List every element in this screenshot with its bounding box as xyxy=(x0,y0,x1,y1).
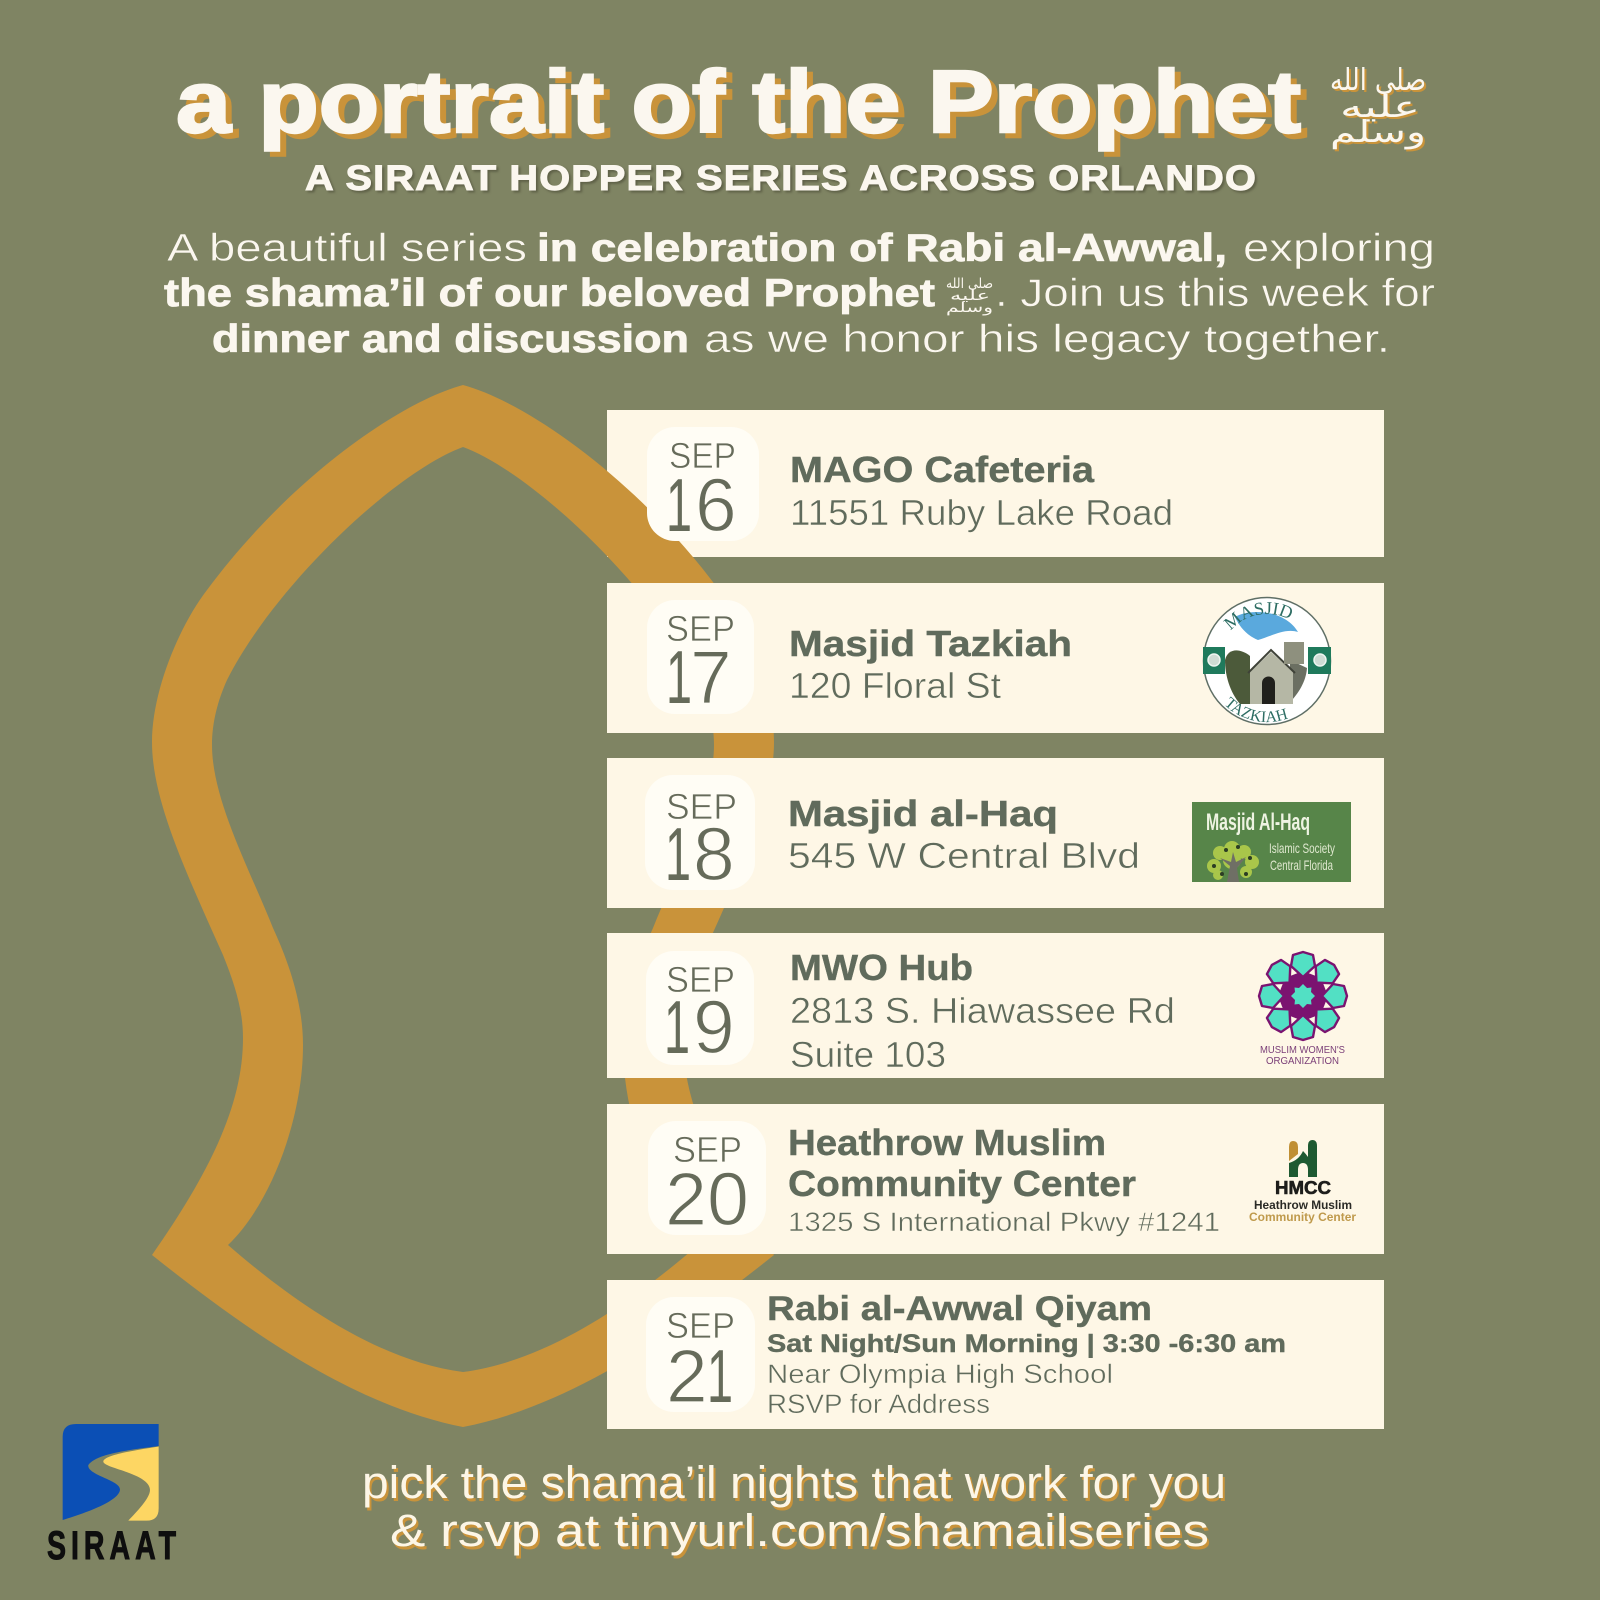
logo: Masjid Tazkiah: MASJID xyxy=(1223,602,1292,630)
card: Rabi al-Awwal Qiyam sep 21: Sat Night/Sun Morning | 3:30 -6:30 am xyxy=(767,1330,1286,1358)
card: MWO Hub sep 19: 9 xyxy=(693,985,735,1069)
card: Heathrow Muslim Community Center sep 20: 20 xyxy=(665,1157,749,1241)
logo: Siraat xyxy=(47,1424,181,1568)
intro paragraph: صلى الله xyxy=(946,276,993,292)
card: Masjid Tazkiah sep 17: SEP xyxy=(666,608,735,649)
icon: honorific calligraphy xyxy=(1330,63,1426,150)
logo: Masjid Al-Haq: Masjid Al-Haq xyxy=(1206,809,1310,836)
logo: Siraat: SIRAAT xyxy=(47,1524,181,1568)
gold arch outline shape xyxy=(152,385,774,1427)
icon: honorific calligraphy: عليه xyxy=(1340,90,1420,125)
card: MAGO Cafeteria sep 16: 1 xyxy=(666,463,692,547)
card: Masjid al-Haq sep 18: 8 xyxy=(693,812,735,896)
icon: honorific calligraphy: وسلم xyxy=(1330,115,1426,150)
card: Masjid al-Haq sep 18: 545 W Central Blvd xyxy=(788,835,1140,876)
card: Heathrow Muslim Community Center sep 20: SEP xyxy=(673,1129,742,1170)
card: Masjid al-Haq sep 18: Masjid al-Haq xyxy=(788,793,1058,834)
logo: Muslim Women's Organization: MUSLIM WOMEN'S xyxy=(1260,1045,1345,1056)
card: Rabi al-Awwal Qiyam sep 21: Rabi al-Awwal Qiyam xyxy=(767,1290,1152,1328)
card: MAGO Cafeteria sep 16: SEP xyxy=(669,435,736,476)
icon: honorific calligraphy: صلى الله xyxy=(1330,63,1426,98)
card: Masjid al-Haq sep 18 xyxy=(607,758,1384,908)
card: Heathrow Muslim Community Center sep 20: Community Center xyxy=(788,1163,1136,1204)
intro paragraph: . Join us this week for xyxy=(995,272,1435,315)
card: Heathrow Muslim Community Center sep 20: Heathrow Muslim xyxy=(788,1122,1106,1163)
card background: sep 16 xyxy=(607,410,1384,557)
intro paragraph: as we honor his legacy together. xyxy=(704,318,1390,361)
card: Masjid al-Haq sep 18: 1 xyxy=(665,812,691,896)
card: MWO Hub sep 19: 2813 S. Hiawassee Rd xyxy=(790,990,1175,1031)
card: Masjid Tazkiah sep 17 xyxy=(607,583,1384,733)
intro paragraph: the shama’il of our beloved Prophet xyxy=(164,272,935,315)
logo: Masjid Tazkiah xyxy=(1202,596,1332,726)
card: MAGO Cafeteria sep 16: MAGO Cafeteria xyxy=(790,449,1095,490)
card: Masjid Tazkiah sep 17: Masjid Tazkiah xyxy=(789,623,1072,664)
logo: HMCC: Community Center xyxy=(1249,1212,1357,1224)
card: Heathrow Muslim Community Center sep 20: 1325 S International Pkwy #1241 xyxy=(788,1207,1220,1237)
card: MAGO Cafeteria sep 16 xyxy=(647,427,1173,547)
card: MWO Hub sep 19 xyxy=(607,933,1384,1078)
subtitle: A SIRAAT HOPPER SERIES ACROSS ORLANDO xyxy=(305,159,1257,198)
logo: HMCC: Heathrow Muslim xyxy=(1254,1200,1352,1212)
card: Rabi al-Awwal Qiyam sep 21: SEP xyxy=(666,1305,735,1346)
card: MWO Hub sep 19: MWO Hub xyxy=(790,947,973,988)
card: Masjid Tazkiah sep 17: 1 xyxy=(666,635,692,719)
card: Heathrow Muslim Community Center sep 20 xyxy=(607,1104,1384,1254)
intro paragraph: in celebration of Rabi al-Awwal, xyxy=(537,227,1227,270)
call to action: pick the shama’il nights that work for you xyxy=(362,1457,1226,1508)
intro paragraph: عليه xyxy=(950,288,990,304)
logo: Muslim Women's Organization xyxy=(1259,952,1347,1067)
card: MWO Hub sep 19: Suite 103 xyxy=(790,1034,946,1075)
logo: HMCC: HMCC xyxy=(1275,1178,1331,1198)
logo: Masjid Tazkiah: TAZKIAH xyxy=(1226,696,1288,722)
logo: Masjid Al-Haq xyxy=(1192,802,1351,882)
call to action: & rsvp at tinyurl.com/shamailseries xyxy=(390,1505,1209,1556)
card: MWO Hub sep 19: 1 xyxy=(664,985,690,1069)
card: Rabi al-Awwal Qiyam sep 21: RSVP for Address xyxy=(767,1389,990,1419)
card: Masjid Tazkiah sep 17: 7 xyxy=(690,635,732,719)
title: a portrait of the Prophet xyxy=(176,52,1301,151)
intro paragraph: exploring xyxy=(1243,227,1435,270)
logo: HMCC xyxy=(1249,1140,1357,1224)
card: MWO Hub sep 19: SEP xyxy=(666,959,735,1000)
card: Masjid Tazkiah sep 17: 120 Floral St xyxy=(789,665,1001,706)
intro paragraph xyxy=(164,227,1435,361)
card: Rabi al-Awwal Qiyam sep 21: 2 xyxy=(666,1334,708,1418)
card: MAGO Cafeteria sep 16: 11551 Ruby Lake Road xyxy=(790,492,1173,533)
card: Rabi al-Awwal Qiyam sep 21 xyxy=(607,1280,1384,1429)
card: Masjid al-Haq sep 18: SEP xyxy=(666,786,737,827)
card: Rabi al-Awwal Qiyam sep 21: Near Olympia High School xyxy=(767,1359,1113,1389)
logo: Masjid Al-Haq: Islamic Society xyxy=(1269,840,1335,856)
card: Rabi al-Awwal Qiyam sep 21: 1 xyxy=(707,1334,733,1418)
logo: Masjid Al-Haq: Central Florida xyxy=(1270,857,1333,873)
intro paragraph: وسلم xyxy=(946,300,993,316)
call to action xyxy=(362,1457,1226,1556)
intro paragraph: A beautiful series xyxy=(167,227,527,270)
intro paragraph: dinner and discussion xyxy=(212,318,689,361)
card: MAGO Cafeteria sep 16: 6 xyxy=(695,463,737,547)
logo: Muslim Women's Organization: ORGANIZATION xyxy=(1266,1056,1339,1067)
